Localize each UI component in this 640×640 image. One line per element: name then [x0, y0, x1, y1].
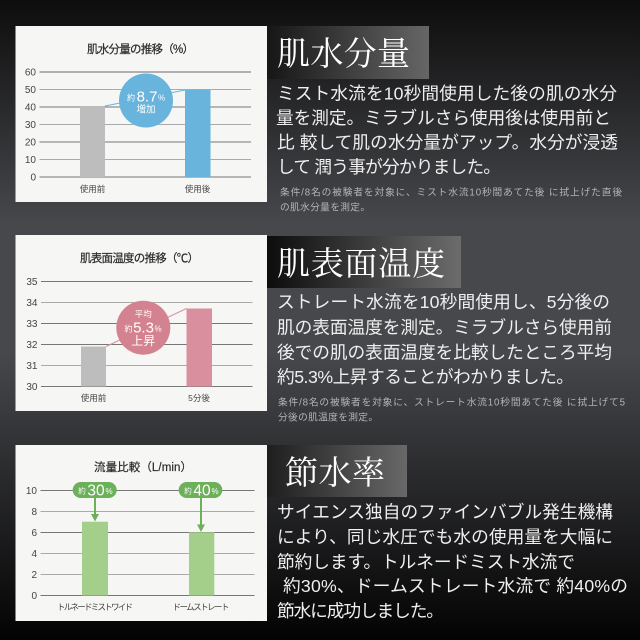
bar chart: skin moisture — [25, 68, 251, 194]
bar chart: skin moisture: 0 — [30, 172, 36, 184]
bar chart: skin moisture: 20 — [25, 138, 36, 148]
callout: about 30 percent: 30 — [87, 482, 105, 500]
callout: average about 5.3 percent rise: 約 — [124, 324, 132, 334]
callout: average about 5.3 percent rise — [116, 301, 170, 355]
heading: skin moisture: 肌水分量 — [277, 36, 410, 73]
bar chart: skin temperature: 5分後 — [188, 393, 210, 403]
note: skin temperature conditions: 分後の肌温度を測定。 — [278, 410, 378, 424]
text block: skin moisture description — [276, 84, 618, 177]
callout: about 8.7 percent increase: % — [158, 94, 165, 102]
bar chart: skin temperature — [26, 277, 252, 403]
bar chart: flow comparison: 4 — [31, 549, 37, 560]
note: skin temperature conditions — [278, 396, 625, 424]
callout: about 30 percent: % — [105, 487, 113, 496]
text block: skin moisture description: して 潤う事が分かりました。 — [277, 157, 501, 177]
callout: about 8.7 percent increase — [119, 74, 173, 128]
callout: about 8.7 percent increase: 約 — [127, 92, 135, 102]
chart title: flow comparison: 流量比較（L/min） — [94, 461, 192, 474]
callout: about 40 percent: % — [211, 487, 219, 496]
text block: skin temperature description: ストレート水流を10秒間使用し、5分後の — [277, 292, 610, 312]
text block: skin moisture description: 比 較して肌の水分量がアップ。水分が浸透 — [277, 132, 618, 152]
text block: skin temperature description: 肌の表面温度を測定。ミラブルさら使用前 — [277, 316, 612, 338]
callout: about 8.7 percent increase: 8.7 — [137, 88, 157, 106]
note: skin moisture conditions: 条件/8名の被験者を対象に、ミスト水流10秒間あてた後 に拭上げた直後 — [280, 186, 622, 198]
bar chart: skin temperature: 30 — [26, 382, 38, 393]
bar chart: flow comparison: 10 — [26, 486, 37, 497]
bar chart: flow comparison — [26, 486, 254, 612]
panel: water flow chart — [16, 445, 267, 621]
bar chart: skin temperature: 33 — [26, 319, 38, 330]
note: skin temperature conditions: 条件/8名の被験者を対象に、ストレート水流10秒間あてた後 に拭上げて5 — [278, 396, 625, 408]
callout: about 40 percent — [179, 482, 222, 532]
text block: water saving description — [277, 501, 628, 621]
panel: skin surface temperature chart — [16, 235, 267, 411]
callout: average about 5.3 percent rise: 平均 — [135, 309, 152, 319]
callout: average about 5.3 percent rise: 5.3 — [133, 320, 154, 336]
heading: water saving rate — [267, 445, 407, 497]
text block: water saving description: 節水に成功しました。 — [277, 601, 444, 621]
bar chart: flow comparison: 2 — [31, 570, 37, 581]
callout: about 8.7 percent increase: 増加 — [136, 104, 156, 116]
text block: skin temperature description — [277, 292, 612, 387]
note: skin moisture conditions — [280, 186, 622, 214]
text block: water saving description: 節約します。トルネードミスト水流で — [277, 552, 575, 572]
bar chart: skin temperature: 35 — [26, 277, 38, 288]
bar chart: skin moisture: 使用前 — [80, 184, 106, 194]
text block: water saving description: サイエンス独自のファインバブル発生機構 — [277, 501, 613, 522]
bar chart: skin moisture: 60 — [25, 68, 36, 78]
heading: skin surface temperature — [267, 236, 461, 288]
bar chart: skin moisture: 10 — [25, 155, 36, 166]
bar chart: skin moisture: 30 — [25, 120, 36, 131]
text block: skin temperature description: 後での肌の表面温度を比較したところ平均 — [277, 342, 612, 362]
bar chart: flow comparison: 0 — [31, 591, 37, 602]
bar chart: skin moisture: 40 — [25, 102, 36, 114]
bar chart: skin temperature: 34 — [26, 298, 38, 309]
chart title: skin moisture: 肌水分量の推移（%） — [87, 42, 194, 56]
heading: water saving rate: 節水率 — [285, 455, 385, 492]
note: skin moisture conditions: の肌水分量を測定。 — [280, 200, 370, 214]
text block: water saving description: 約30%、ドームストレート水流で 約40%の — [283, 576, 628, 596]
chart title: skin temperature: 肌表面温度の推移（℃） — [80, 251, 199, 265]
bar chart: skin moisture: 50 — [25, 85, 36, 96]
heading: skin moisture — [267, 26, 429, 79]
bar chart: skin moisture: 使用後 — [185, 184, 211, 194]
bar chart: flow comparison: 6 — [31, 528, 37, 539]
callout: average about 5.3 percent rise: % — [154, 324, 162, 334]
callout: about 40 percent: 40 — [193, 482, 211, 500]
bar chart: flow comparison: 8 — [31, 507, 37, 518]
text block: skin moisture description: 量を測定。ミラブルさら使用後は使用前と — [276, 107, 611, 128]
bar chart: skin temperature: 32 — [26, 340, 38, 351]
text block: skin temperature description: 約5.3%上昇することがわかりました。 — [277, 367, 574, 387]
bar chart: flow comparison: トルネードミストワイド — [57, 602, 133, 612]
callout: about 40 percent: 約 — [184, 486, 192, 496]
callout: average about 5.3 percent rise: 上昇 — [131, 334, 155, 348]
text block: water saving description: により、同じ水圧でも水の使用量を大幅に — [277, 527, 613, 547]
panel: skin moisture chart — [16, 26, 267, 202]
bar chart: skin temperature: 31 — [26, 361, 38, 372]
bar chart: flow comparison: ドームストレート — [172, 602, 230, 612]
heading: skin surface temperature: 肌表面温度 — [277, 246, 445, 283]
bar chart: skin temperature: 使用前 — [81, 393, 107, 403]
callout: about 30 percent — [73, 482, 117, 522]
callout: about 30 percent: 約 — [78, 486, 86, 496]
text block: skin moisture description: ミスト水流を10秒間使用した後の肌の水分 — [277, 84, 617, 104]
